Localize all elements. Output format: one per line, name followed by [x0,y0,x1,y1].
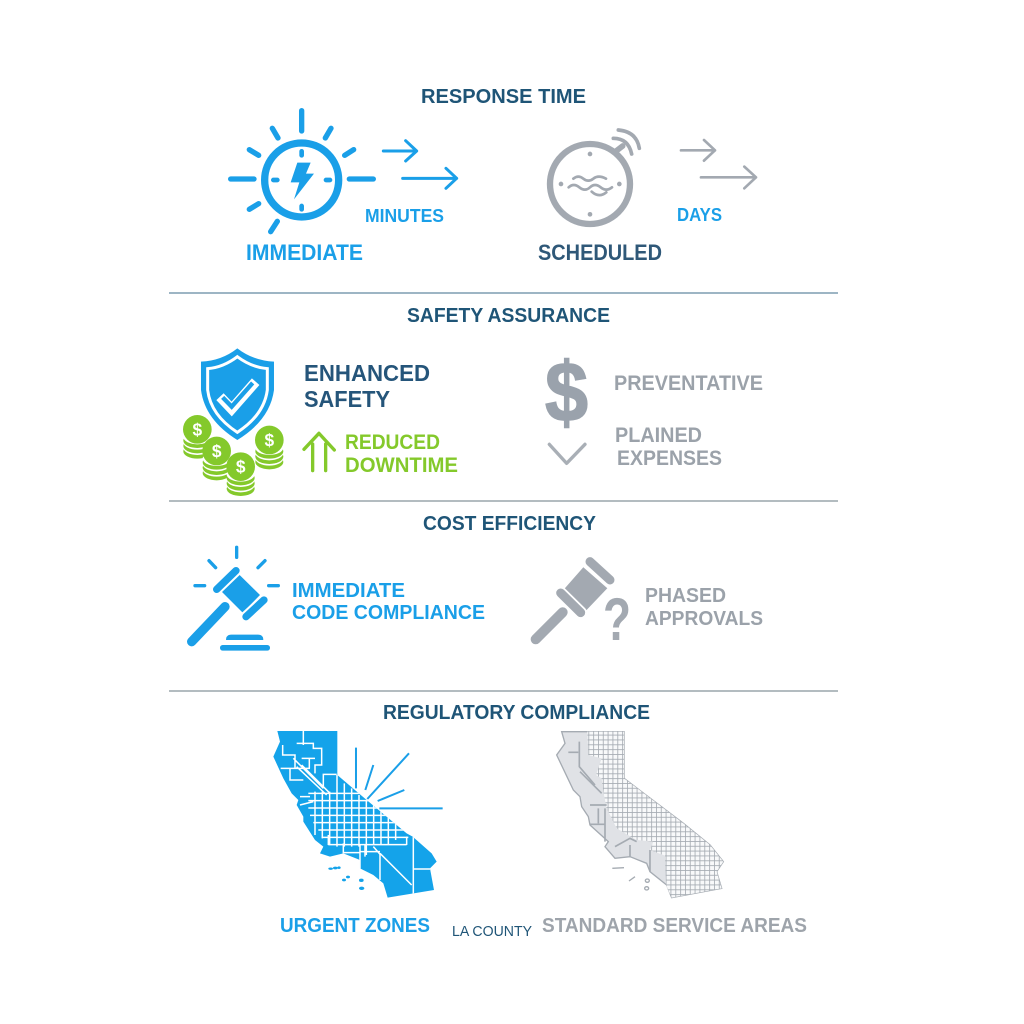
icon: coin stacks: $ [265,430,275,450]
label: reduced downtime: DOWNTIME [345,454,458,477]
icon: coin stacks: $ [212,441,222,461]
label: preventative: PREVENTATIVE [614,372,763,395]
label: scheduled: SCHEDULED [538,240,662,265]
heading: regulatory compliance: REGULATORY COMPLIANCE [383,702,650,724]
label: enhanced safety: SAFETY [304,386,390,412]
heading: response time: RESPONSE TIME [421,86,586,108]
heading: safety assurance: SAFETY ASSURANCE [407,305,610,327]
map: urgent zones [273,731,437,898]
label: immediate code compliance: IMMEDIATE [292,580,405,602]
arrows: immediate speed [383,141,457,188]
label: reduced downtime [345,431,458,477]
label: reduced downtime: REDUCED [345,431,440,454]
section 3: cost efficiency [192,513,763,653]
label: la county: LA COUNTY [452,924,532,940]
label: enhanced safety: ENHANCED [304,360,430,386]
label: plained expenses [615,424,722,470]
label: immediate code compliance [292,580,485,624]
icon: shield with check [201,348,274,440]
icon: blue gavel [192,547,278,651]
section 1: response time [231,86,756,265]
section 2: safety assurance [183,305,763,496]
label: days: DAYS [677,205,722,225]
icon: question mark: ? [603,586,631,653]
heading: cost efficiency: COST EFFICIENCY [423,513,597,535]
label: plained expenses: PLAINED [615,424,702,447]
icon: coin stacks: $ [193,419,203,439]
icon: coin stacks [183,415,284,496]
icon: green up arrow [304,433,334,471]
label: enhanced safety [304,360,430,412]
label: urgent zones: URGENT ZONES [280,915,430,937]
icon: down chevron [549,444,585,463]
label: plained expenses: EXPENSES [617,447,722,470]
label: phased approvals [645,585,763,630]
icon: gray gavel [536,562,610,639]
icon: radiating lines [356,748,443,808]
icon: coin stacks: $ [236,457,246,477]
label: immediate code compliance: CODE COMPLIANCE [292,602,485,624]
label: minutes: MINUTES [365,206,444,226]
icon: dollar sign: $ [545,345,588,439]
section 4: regulatory compliance [273,702,807,940]
label: standard service areas: STANDARD SERVICE AREAS [542,915,807,937]
arrows: scheduled pace [681,140,756,188]
icon: scheduled clock with signal [550,130,639,224]
map: standard service areas [557,732,723,898]
label: phased approvals: PHASED [645,585,726,607]
label: phased approvals: APPROVALS [645,608,763,630]
label: immediate: IMMEDIATE [246,240,363,265]
icon: sun with lightning clock [231,111,373,232]
